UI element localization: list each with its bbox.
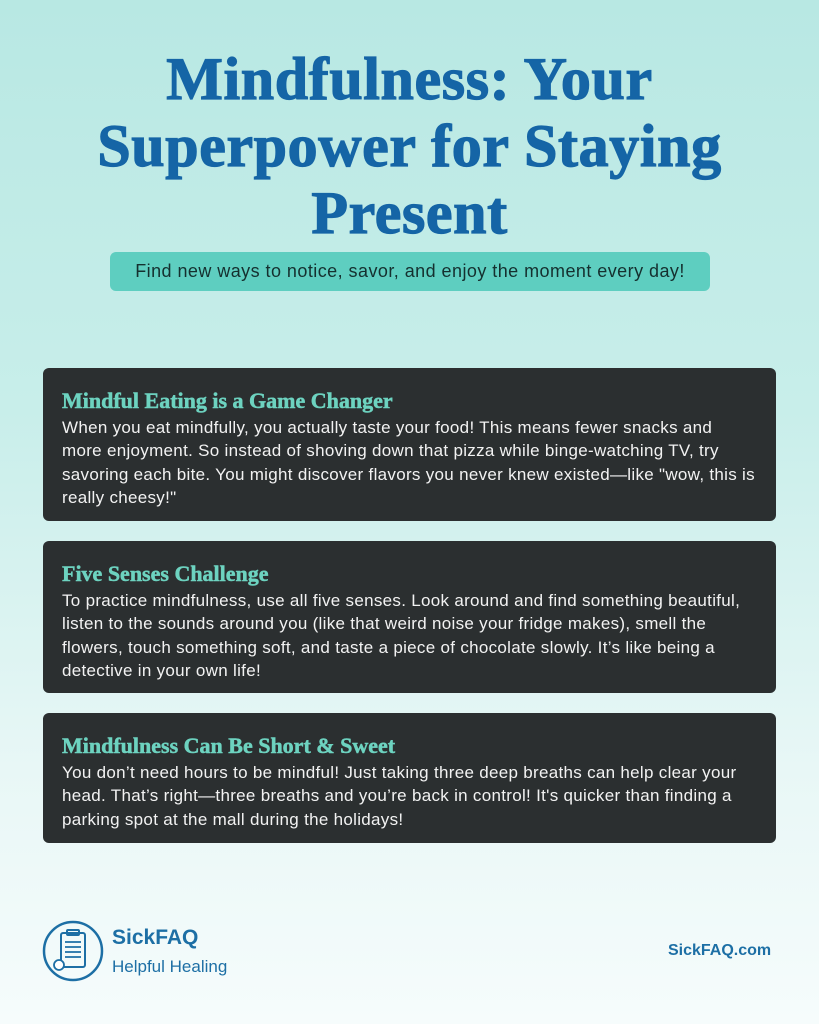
title: Superpower for Staying (97, 113, 722, 179)
heading: short and sweet: Mindfulness Can Be Short & Sweet (62, 733, 395, 758)
text: five senses: detective in your own life! (62, 661, 261, 680)
text: five senses: listen to the sounds around you (like that weird noise your fridge makes), smell the (62, 614, 706, 633)
text: five senses (62, 591, 740, 680)
heading: five senses: Five Senses Challenge (62, 561, 269, 586)
title (97, 46, 722, 246)
subtitle pill: Find new ways to notice, savor, and enjoy the moment every day! (135, 261, 685, 281)
text: short and sweet: parking spot at the mall during the holidays! (62, 810, 403, 829)
text: short and sweet (62, 763, 736, 829)
text: mindful eating: savoring each bite. You might discover flavors you never knew existed—like "wow, this is (62, 465, 755, 484)
subtitle pill (110, 252, 710, 291)
heading: mindful eating: Mindful Eating is a Game Changer (62, 388, 393, 413)
text: short and sweet: head. That’s right—three breaths and you’re back in control! It's quicker than finding a (62, 786, 732, 805)
panel: mindful eating (43, 368, 776, 521)
title: Mindfulness: Your (166, 46, 653, 112)
text: five senses: flowers, touch something soft, and taste a piece of chocolate slowly. It’s like being a (62, 638, 715, 657)
text: mindful eating: When you eat mindfully, you actually taste your food! This means fewer snacks and (62, 418, 712, 437)
website: SickFAQ.com (668, 942, 771, 959)
brand name: SickFAQ (112, 926, 198, 949)
icon: logo clipboard (42, 920, 104, 982)
text: mindful eating: really cheesy!" (62, 488, 176, 507)
text: mindful eating (62, 418, 755, 507)
panel: short and sweet (43, 713, 776, 843)
text: mindful eating: more enjoyment. So instead of shoving down that pizza while binge-watching TV, try (62, 441, 719, 460)
text: short and sweet: You don’t need hours to be mindful! Just taking three deep breaths can help clear your (62, 763, 736, 782)
text: five senses: To practice mindfulness, use all five senses. Look around and find something beautiful, (62, 591, 740, 610)
panel: five senses (43, 541, 776, 693)
title: Present (311, 180, 508, 246)
brand tagline: Helpful Healing (112, 957, 227, 976)
